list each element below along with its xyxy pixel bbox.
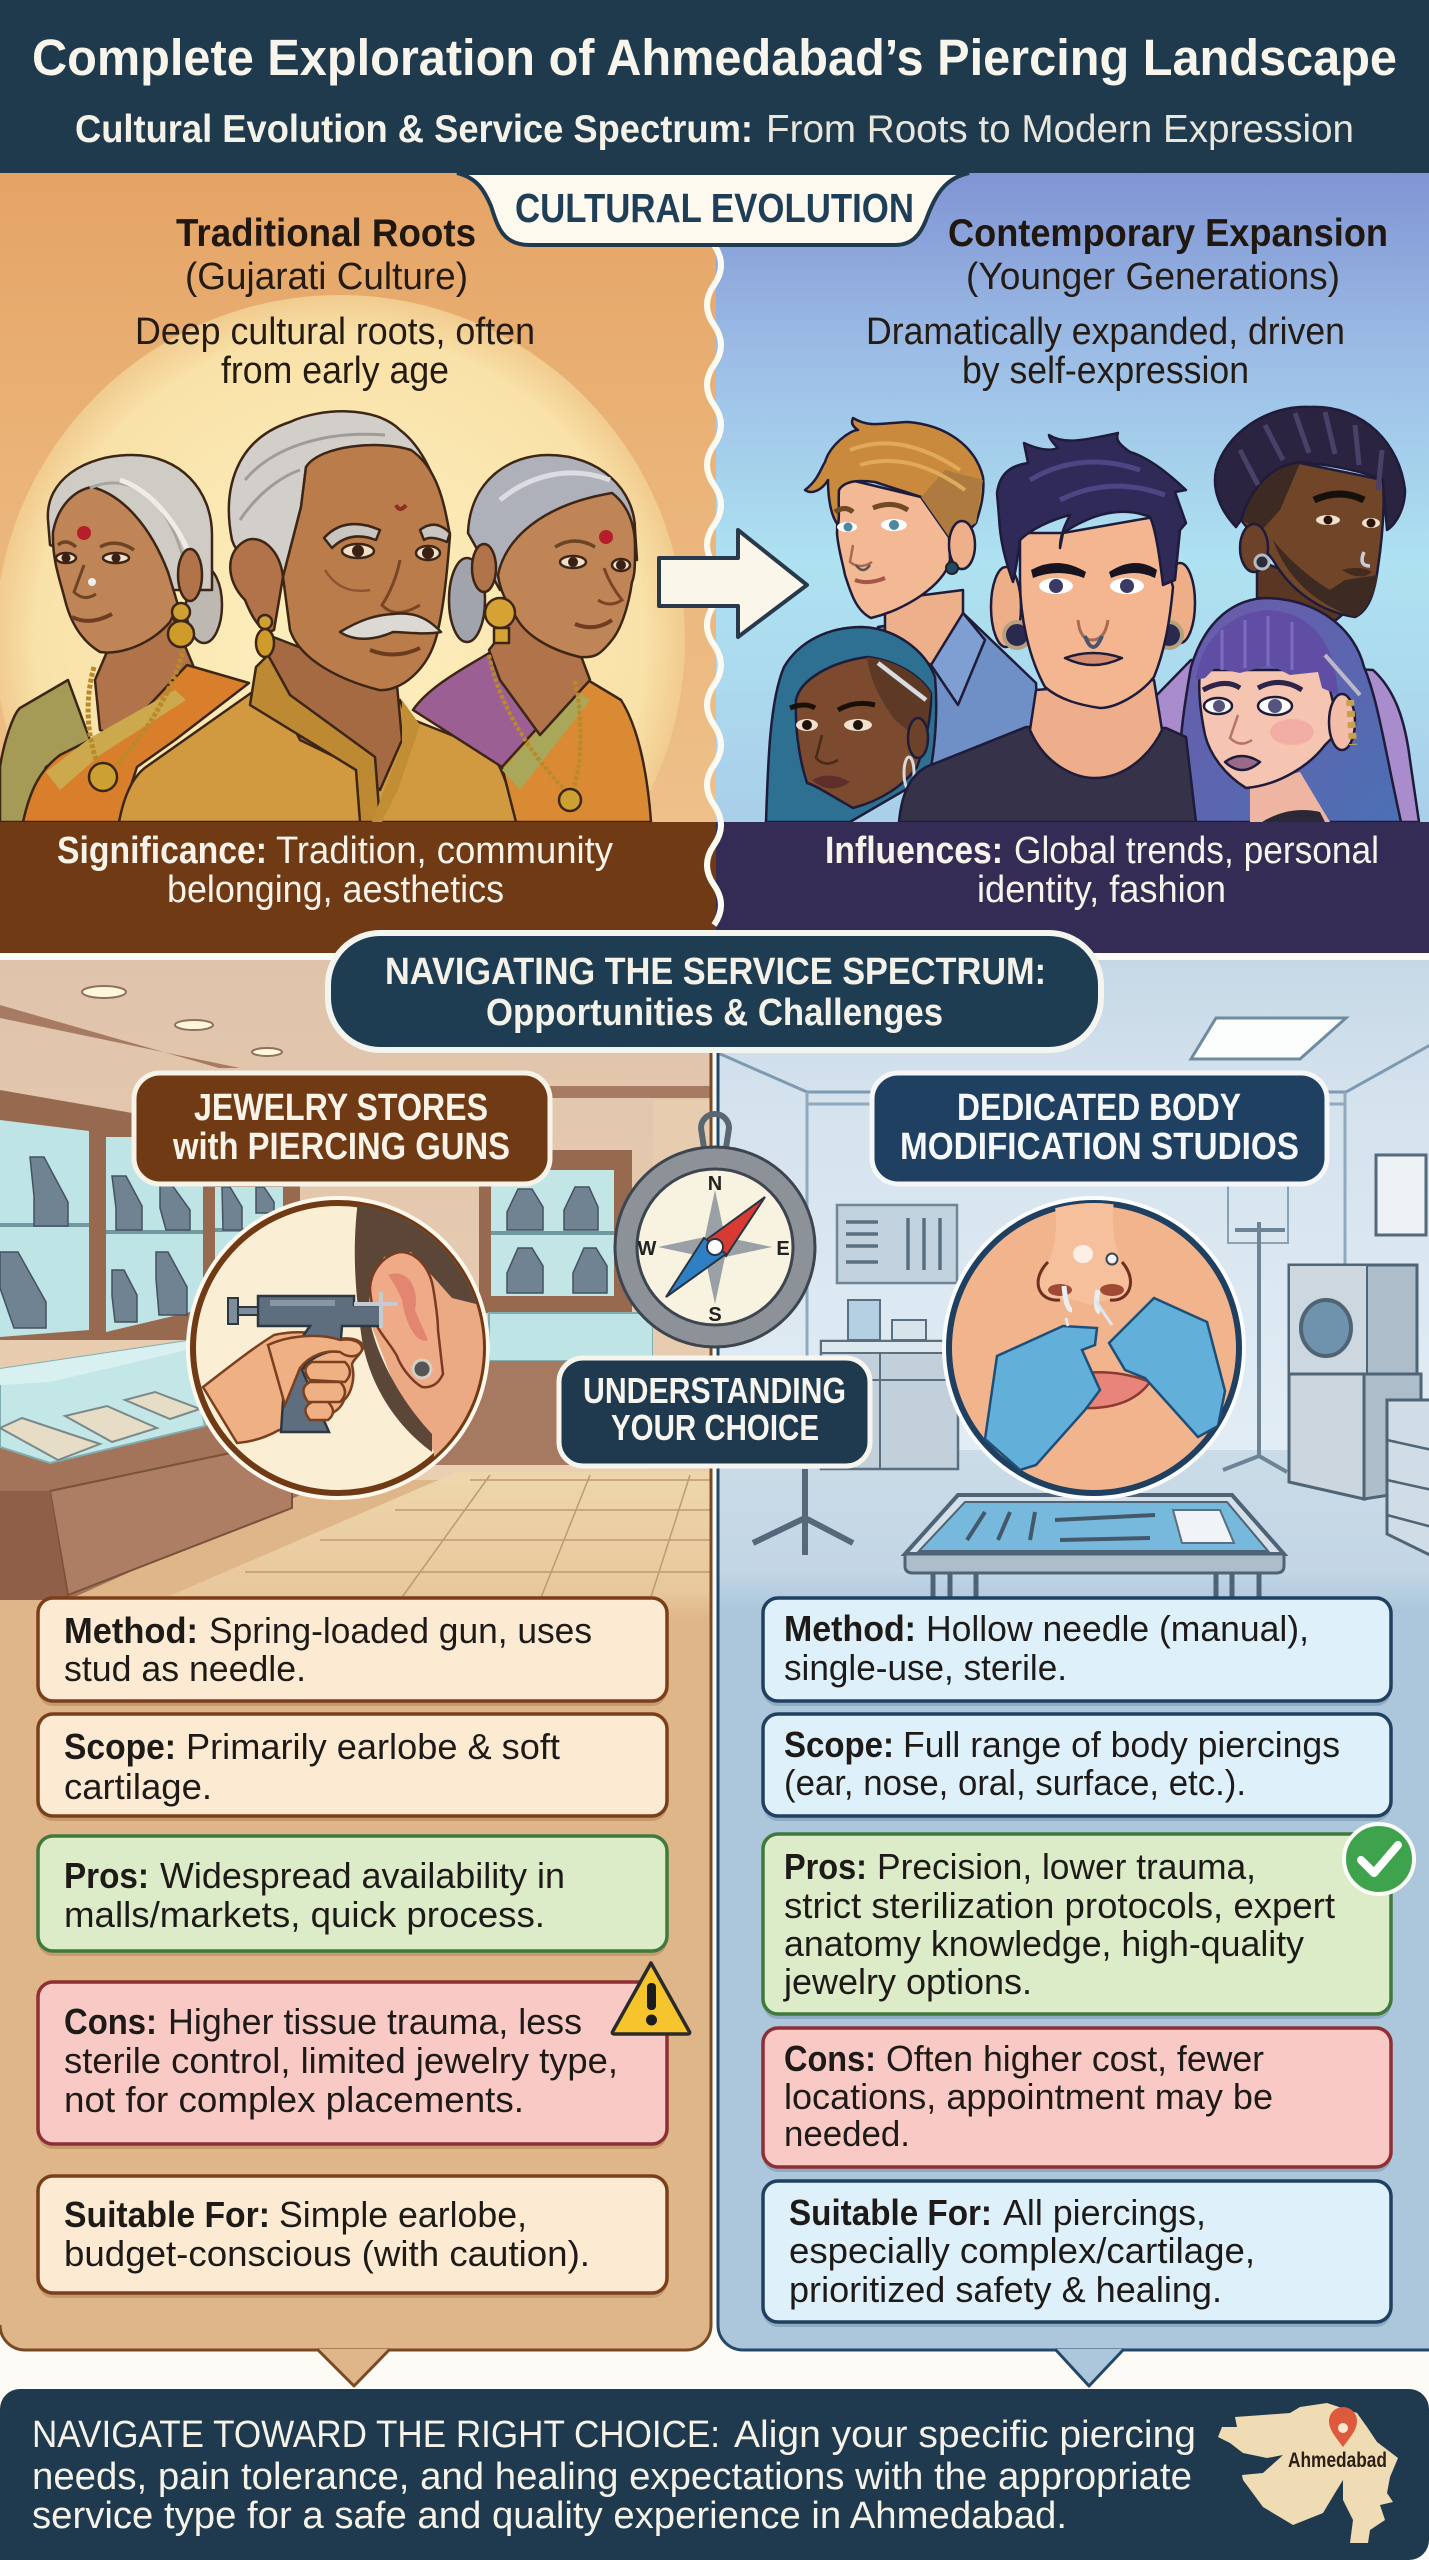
subheading: gujarati culture: (Gujarati Culture): [185, 256, 468, 298]
card: jewelry pros: malls/markets, quick process.: [64, 1894, 545, 1935]
label pill: jewelry stores: JEWELRY STORES: [194, 1087, 488, 1129]
display cases: [0, 1090, 632, 1340]
card: jewelry suitable for: Simple earlobe,: [279, 2194, 527, 2235]
card: jewelry suitable for: budget-conscious (with caution).: [64, 2233, 590, 2274]
heading pill: navigating the service spectrum: NAVIGATING THE SERVICE SPECTRUM:: [385, 951, 1046, 993]
heading: traditional roots: Traditional Roots: [176, 212, 476, 255]
text: dramatically expanded: [866, 311, 1345, 392]
card: studio suitable for: prioritized safety & healing.: [789, 2269, 1222, 2310]
card: jewelry suitable for: Suitable For:: [64, 2194, 270, 2235]
card: jewelry scope: [38, 1714, 667, 1821]
elder man centre: [119, 411, 516, 822]
influences band: [716, 822, 1429, 953]
lilac jacket behind: [1150, 660, 1419, 822]
panel: jewelry stores: [0, 960, 713, 2350]
icon: green check: [1344, 1824, 1414, 1894]
card: jewelry method: [38, 1598, 667, 1706]
illustration: studio interior: [718, 960, 1429, 1610]
heading pill: navigating the service spectrum: [328, 933, 1101, 1050]
panel: contemporary expansion: [716, 173, 1429, 953]
text: deep cultural roots: Deep cultural roots, often: [135, 311, 535, 353]
wavy divider: [707, 245, 721, 925]
map: gujarat with ahmedabad pin: [1218, 2403, 1398, 2543]
icon: compass: W: [638, 1238, 657, 1260]
icon: compass: S: [708, 1304, 722, 1326]
pointer: right panel: [1055, 2349, 1124, 2386]
text: dramatically expanded: Dramatically expanded, driven: [866, 311, 1345, 353]
heading: contemporary expansion: Contemporary Expansion: [948, 212, 1388, 255]
elder woman right: [413, 455, 651, 822]
certificate: [1376, 1155, 1426, 1235]
tab: cultural evolution: [457, 173, 969, 245]
stool: [753, 1469, 853, 1555]
illustration: piercing gun at earlobe: [186, 1196, 500, 1500]
card: studio suitable for: All piercings,: [1003, 2192, 1206, 2233]
header bar: [0, 0, 1429, 173]
label pill: body modification studios: MODIFICATION STUDIOS: [900, 1126, 1299, 1168]
heading pill: navigating the service spectrum: Opportunities & Challenges: [486, 992, 943, 1034]
centre young man: [899, 433, 1196, 822]
card: jewelry pros: [38, 1836, 667, 1956]
card: studio cons: needed.: [784, 2113, 910, 2154]
panel: body modification studios: [718, 960, 1429, 2350]
footer text: needs, pain tolerance, and healing expectations with the appropriate: [32, 2456, 1192, 2498]
text: deep cultural roots: from early age: [221, 350, 449, 392]
back counter: [489, 1313, 653, 1361]
label pill: body modification studios: [872, 1073, 1327, 1184]
footer text: NAVIGATE TOWARD THE RIGHT CHOICE:: [32, 2414, 720, 2456]
footer text: service type for a safe and quality experience in Ahmedabad.: [32, 2495, 1067, 2537]
card: jewelry method: Spring-loaded gun, uses: [209, 1610, 592, 1651]
card: studio pros: [763, 1834, 1391, 2019]
cabinet and bottles: [821, 1300, 958, 1469]
subheading: younger generations: (Younger Generations): [966, 256, 1340, 298]
card: studio suitable for: especially complex/cartilage,: [789, 2230, 1255, 2271]
icon: compass: N: [708, 1173, 722, 1195]
icon: compass: [615, 1114, 815, 1347]
card: jewelry pros: Pros:: [64, 1855, 149, 1896]
card: studio pros: Pros:: [784, 1846, 867, 1887]
icon: compass: E: [776, 1238, 790, 1260]
label pill: understanding your choice: [559, 1358, 870, 1466]
card: studio scope: Full range of body piercings: [903, 1724, 1340, 1765]
elder woman left: [0, 455, 249, 822]
illustration: jewelry store interior: [0, 960, 713, 1620]
necklace busts: [0, 1157, 607, 1328]
card: jewelry scope: cartilage.: [64, 1766, 212, 1807]
card: studio cons: [763, 2028, 1391, 2172]
front counter: [0, 1420, 300, 1600]
tool board: [837, 1205, 957, 1283]
card: jewelry cons: Higher tissue trauma, less: [168, 2001, 582, 2042]
significance band: Tradition, community: [276, 830, 613, 872]
young man with locks: [1215, 407, 1405, 625]
arrow: evolution: [659, 530, 807, 637]
illustration: nose piercing with gloved hands: [942, 1196, 1246, 1500]
card: jewelry method: Method:: [64, 1610, 198, 1651]
right girl purple hair: [1180, 598, 1401, 822]
text: deep cultural roots: [135, 311, 535, 392]
subtitle: Cultural Evolution & Service Spectrum:: [75, 108, 753, 151]
card: jewelry cons: not for complex placements.: [64, 2079, 524, 2120]
text: dramatically expanded: by self-expression: [962, 350, 1249, 392]
card: jewelry suitable for: [38, 2176, 667, 2298]
card: studio cons: Cons:: [784, 2038, 876, 2079]
subtitle: [75, 108, 1354, 151]
card: jewelry pros: Widespread availability in: [160, 1855, 565, 1896]
iv stand: [1223, 1222, 1287, 1472]
significance band: Significance:: [57, 830, 267, 872]
significance band: [0, 822, 716, 953]
illustration: four young people: [766, 407, 1419, 822]
footer text: [32, 2414, 1196, 2537]
card: studio scope: [763, 1714, 1391, 1821]
card: studio scope: (ear, nose, oral, surface, etc.).: [784, 1762, 1246, 1803]
card: studio suitable for: Suitable For:: [789, 2192, 992, 2233]
card: studio cons: Often higher cost, fewer: [886, 2038, 1264, 2079]
card: studio method: Hollow needle (manual),: [926, 1608, 1309, 1649]
card: jewelry scope: Primarily earlobe & soft: [186, 1726, 560, 1767]
card: jewelry cons: [38, 1982, 667, 2149]
card: studio method: [763, 1598, 1391, 1706]
icon: warning triangle: [612, 1963, 690, 2034]
illustration: three elders: [0, 411, 651, 822]
blond young man: [805, 418, 1040, 790]
card: studio suitable for: [763, 2181, 1391, 2327]
floor: [170, 1480, 710, 1608]
card: jewelry cons: Cons:: [64, 2001, 157, 2042]
pointer: left panel: [317, 2349, 390, 2386]
title: Complete Exploration of Ahmedabad’s Piercing Landscape: [32, 29, 1397, 86]
card: studio cons: locations, appointment may be: [784, 2076, 1273, 2117]
autoclave: [1289, 1265, 1429, 1556]
footer text: Align your specific piercing: [734, 2414, 1196, 2456]
card: jewelry cons: sterile control, limited jewelry type,: [64, 2040, 618, 2081]
label pill: body modification studios: DEDICATED BODY: [957, 1087, 1241, 1129]
card: jewelry method: stud as needle.: [64, 1648, 306, 1689]
influences band: identity, fashion: [977, 869, 1226, 911]
subtitle: From Roots to Modern Expression: [766, 108, 1354, 151]
tab: cultural evolution: CULTURAL EVOLUTION: [515, 185, 914, 231]
ceiling light: [1191, 1018, 1346, 1059]
card: studio scope: Scope:: [784, 1724, 894, 1765]
panel: traditional roots: [0, 173, 716, 985]
card: studio pros: strict sterilization protocols, expert: [784, 1885, 1335, 1926]
map: gujarat with ahmedabad pin: Ahmedabad: [1288, 2449, 1387, 2472]
left girl teal hair: [766, 627, 936, 822]
label pill: understanding your choice: UNDERSTANDING: [583, 1370, 846, 1411]
card: studio pros: Precision, lower trauma,: [877, 1846, 1256, 1887]
label pill: jewelry stores: with PIERCING GUNS: [172, 1126, 510, 1168]
card: studio pros: jewelry options.: [783, 1961, 1032, 2002]
significance band: belonging, aesthetics: [167, 869, 504, 911]
card: studio method: single-use, sterile.: [784, 1647, 1067, 1688]
influences band: Global trends, personal: [1014, 830, 1379, 872]
card: studio pros: anatomy knowledge, high-quality: [784, 1923, 1304, 1964]
footer banner: [0, 2389, 1429, 2560]
label pill: jewelry stores: [134, 1073, 550, 1184]
label pill: understanding your choice: YOUR CHOICE: [611, 1407, 819, 1448]
card: studio method: Method:: [784, 1608, 916, 1649]
instrument tray table: [905, 1495, 1284, 1600]
card: jewelry scope: Scope:: [64, 1726, 176, 1767]
influences band: Influences:: [825, 830, 1003, 872]
